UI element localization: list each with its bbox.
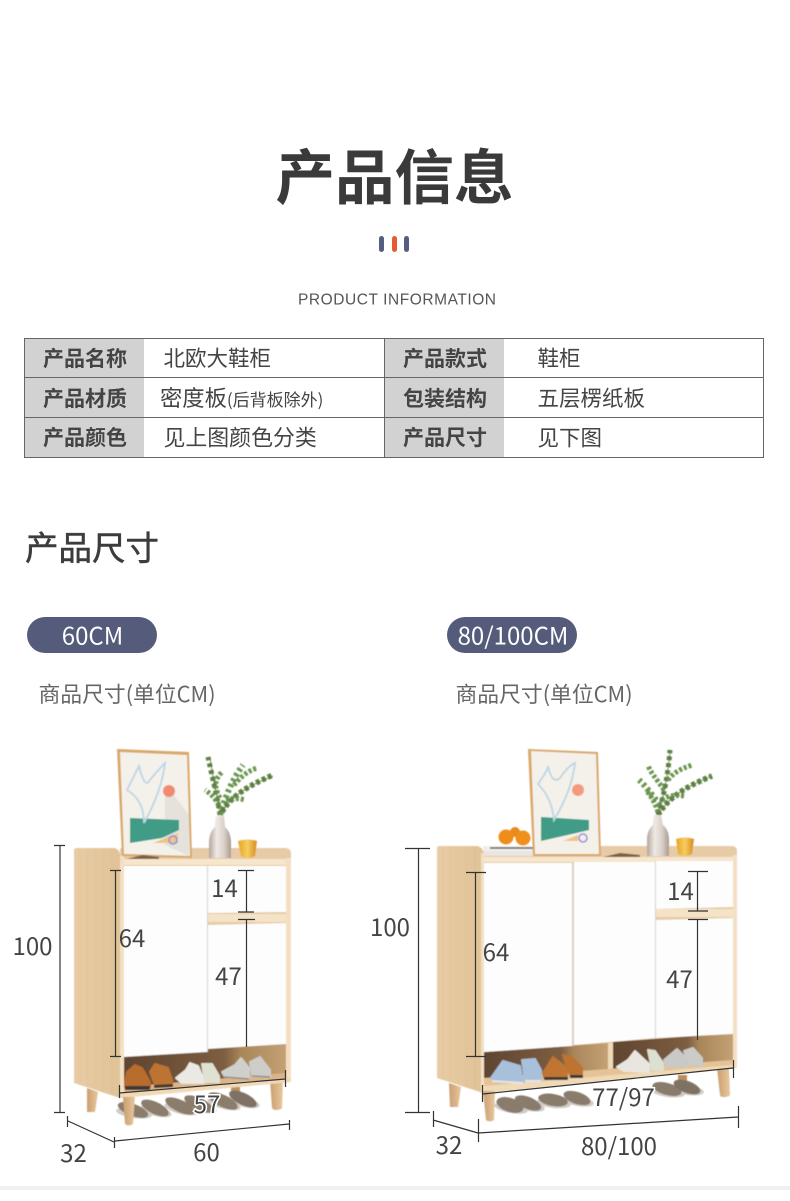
dimension label 77/97: 77/97 — [592, 1078, 655, 1113]
framed picture 60 — [117, 749, 192, 858]
section heading: 产品尺寸 — [25, 521, 159, 570]
dimension label 47: 47 — [666, 960, 693, 995]
unit note right: 商品尺寸(单位CM) — [456, 678, 633, 709]
dimension label 100: 100 — [13, 927, 52, 962]
shoes 60 — [125, 1057, 270, 1090]
product information table: 产品款式 — [403, 343, 487, 373]
dimension label 100: 100 — [370, 908, 410, 943]
glass cup 60 — [238, 840, 257, 858]
dimension label 14: 14 — [211, 869, 238, 904]
product information table: 密度板(后背板除外) — [160, 381, 323, 413]
product information table: 五层楞纸板 — [538, 382, 645, 413]
small keys 60 — [126, 855, 159, 859]
slippers 60 — [115, 1087, 261, 1121]
cabinet body 60 — [74, 848, 291, 1112]
dimension label 47: 47 — [215, 957, 242, 992]
product information table: 北欧大鞋柜 — [164, 342, 271, 373]
plant 60 — [205, 757, 273, 815]
product information table: 产品颜色 — [43, 422, 127, 452]
vase 60 — [209, 816, 231, 858]
title: 产品信息 — [276, 131, 514, 217]
product information table: 见下图 — [538, 422, 602, 452]
framed picture 80 — [528, 749, 601, 856]
dimensions 80/100cm — [370, 848, 738, 1162]
front leg 80 — [483, 1091, 495, 1122]
product information table — [24, 338, 764, 458]
doors 80 — [484, 861, 733, 1052]
product information table: 产品尺寸 — [403, 422, 487, 452]
dimensions 60cm — [13, 845, 290, 1169]
product information table: 产品材质 — [43, 383, 127, 413]
dimension label 32: 32 — [60, 1134, 87, 1169]
vase 80 — [647, 815, 669, 856]
cabinet 80/100cm — [437, 749, 737, 1122]
cabinet body 80 — [437, 846, 737, 1107]
shoes 80 — [491, 1048, 702, 1083]
product information table: 包装结构 — [403, 383, 487, 413]
bottom strip — [0, 1186, 790, 1190]
cabinet 60cm — [74, 749, 291, 1126]
product information table: 产品名称 — [43, 343, 127, 373]
doors 60 — [124, 866, 286, 1057]
size pill: 60CM: 60CM — [62, 616, 123, 652]
subtitle: PRODUCT INFORMATION — [298, 292, 496, 308]
size pill: 80/100CM: 80/100CM — [458, 616, 568, 652]
slippers 80 — [493, 1077, 705, 1116]
plant 80 — [639, 750, 712, 815]
dimension label 64: 64 — [119, 919, 145, 954]
dimension label 80/100: 80/100 — [581, 1127, 657, 1162]
front leg 60 — [123, 1097, 135, 1126]
small keys 80 — [603, 853, 640, 857]
dimension label 14: 14 — [667, 872, 694, 907]
decorative title marks — [379, 236, 409, 252]
dimension label 57: 57 — [194, 1085, 220, 1120]
dimension label 32: 32 — [436, 1126, 462, 1161]
books and oranges 80 — [483, 827, 551, 856]
dimension label 64: 64 — [483, 933, 509, 968]
product information table: 见上图颜色分类 — [164, 422, 317, 452]
size pill: 60CM — [27, 616, 157, 653]
dimension label 60: 60 — [193, 1133, 220, 1168]
product information table: 鞋柜 — [538, 342, 581, 373]
glass cup 80 — [676, 838, 694, 856]
unit note left: 商品尺寸(单位CM) — [38, 678, 216, 709]
